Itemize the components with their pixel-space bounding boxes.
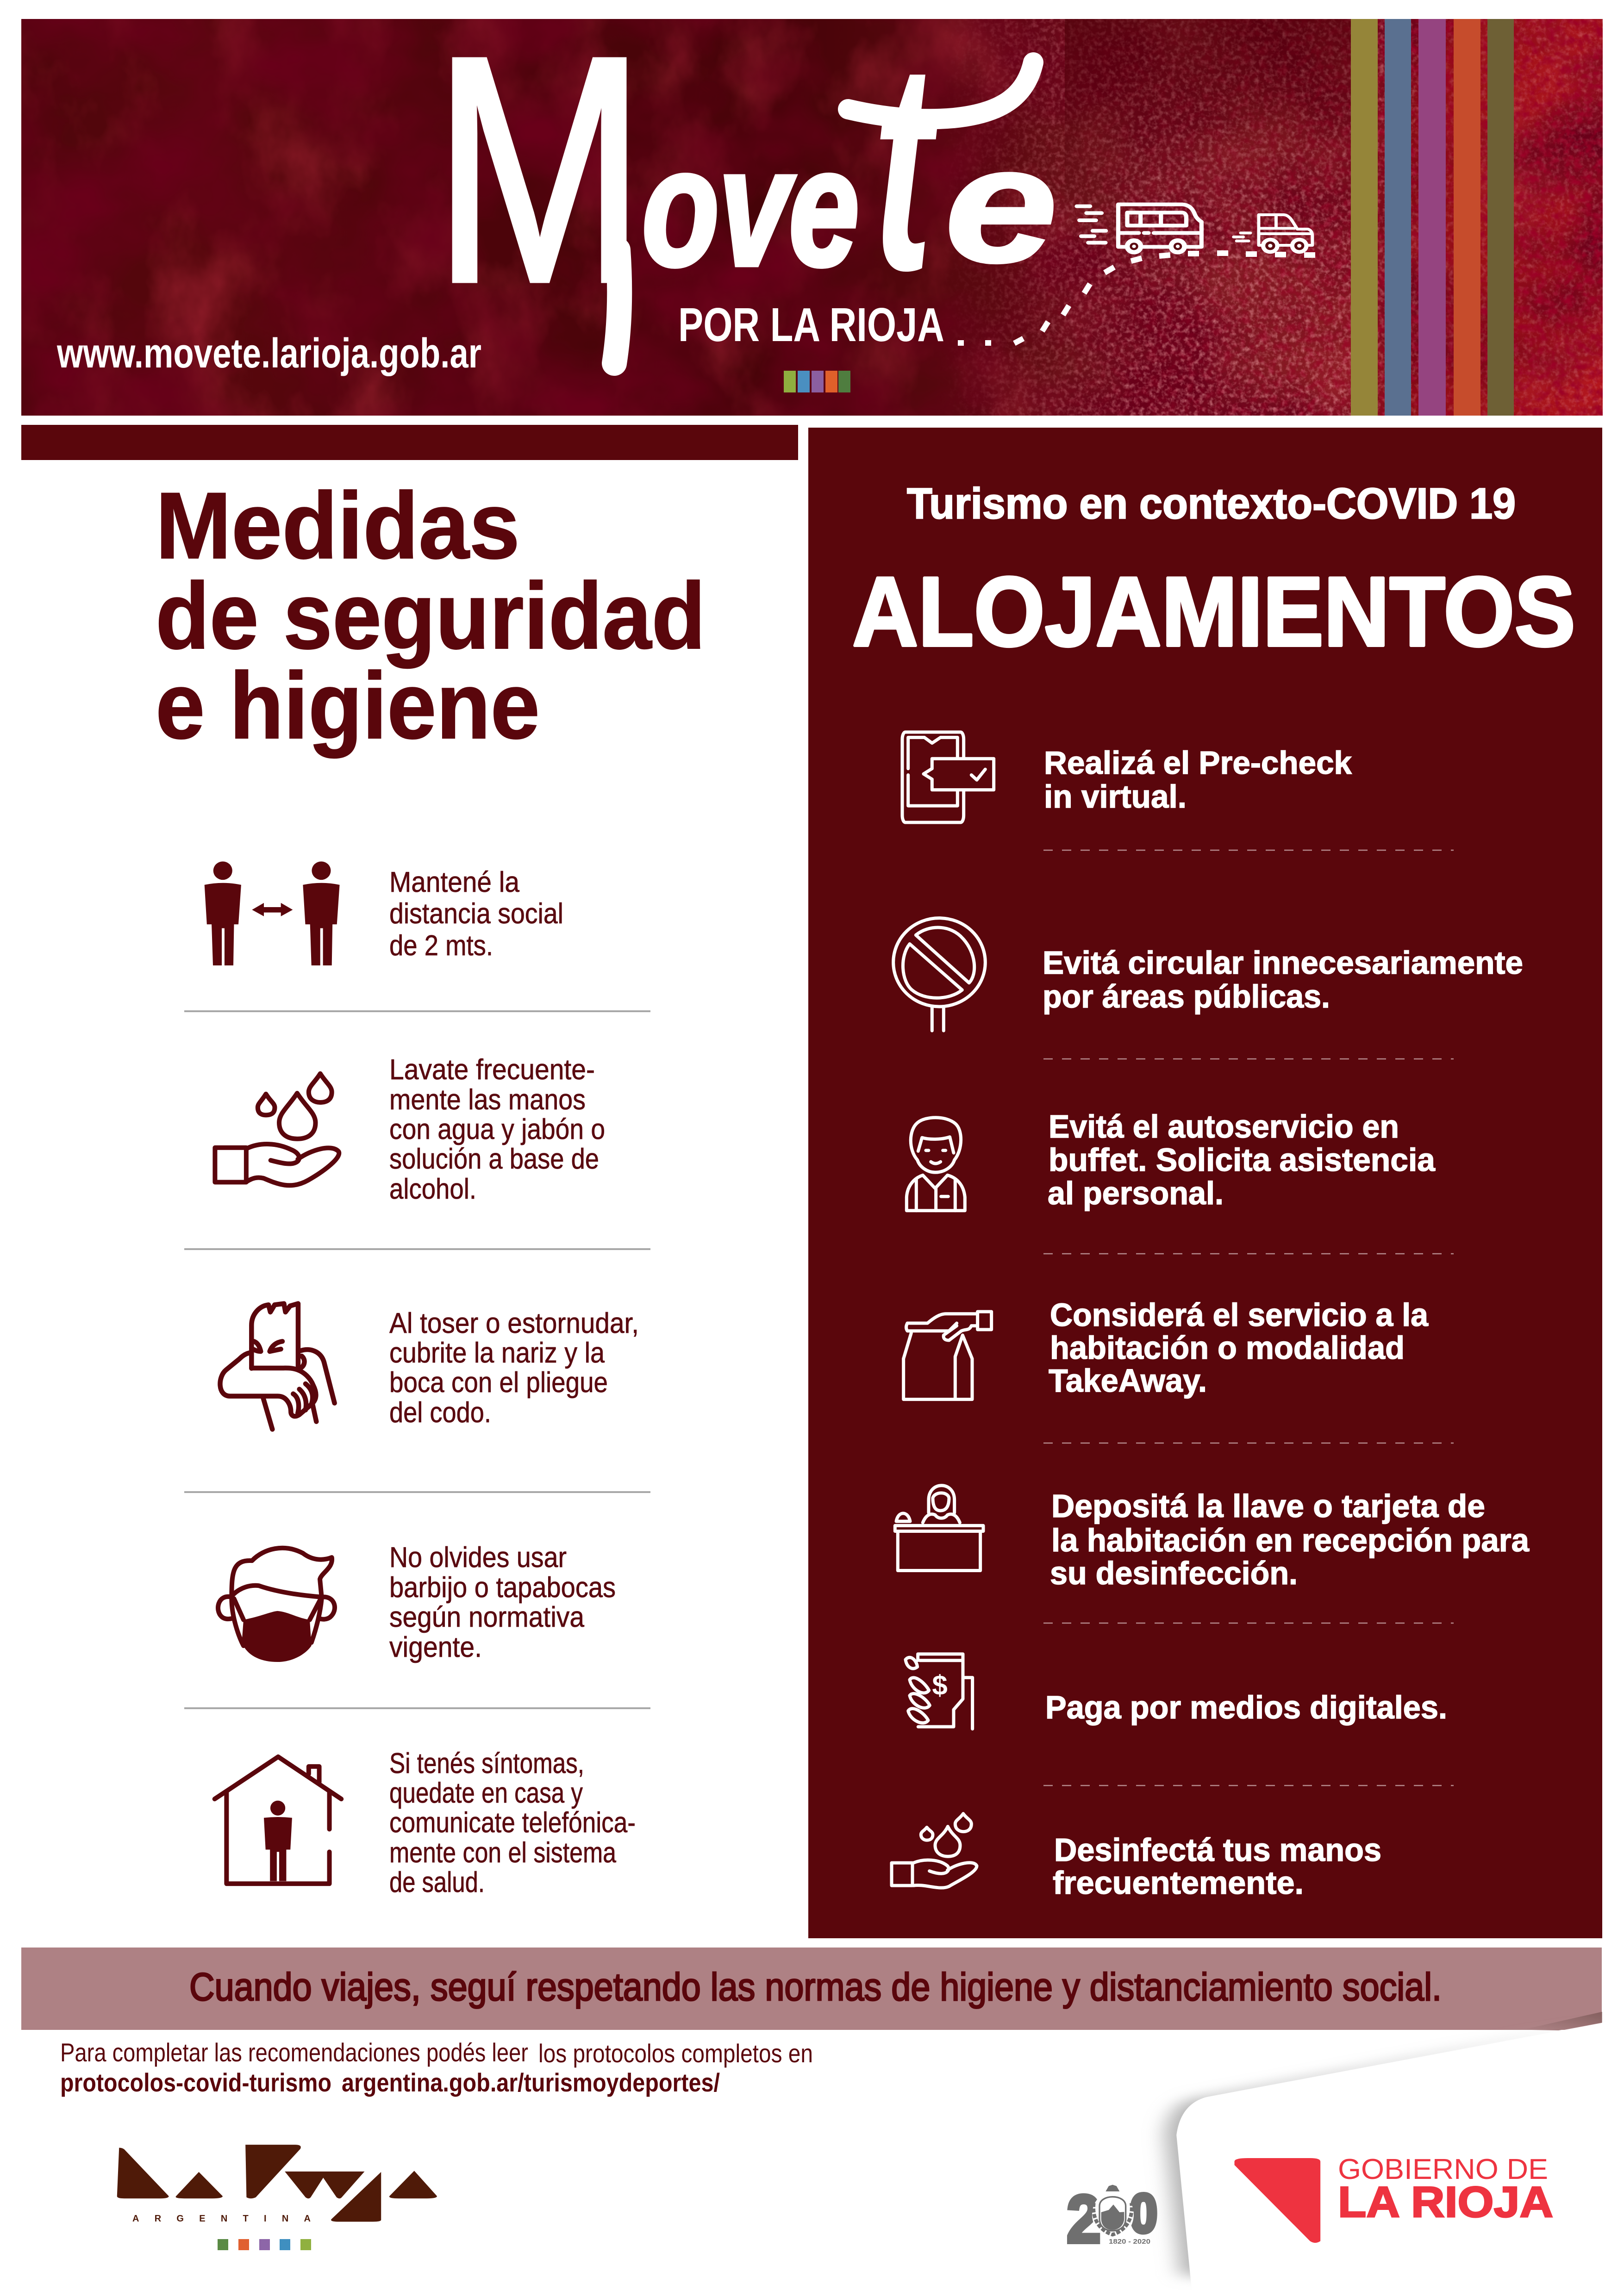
text: medios digitales: Paga por medios digitales. (1045, 1689, 1447, 1725)
script logotype Movete: t (873, 0, 940, 333)
text: lavado de manos: mente las manos (389, 1084, 586, 1116)
logo red triangle (1235, 2158, 1320, 2243)
text: desinfectá manos: frecuentemente. (1053, 1865, 1304, 1901)
colour bars under tagline (784, 371, 850, 392)
icon: phone pre-check (902, 732, 994, 822)
la rioja: LA RIOJA (1338, 2178, 1553, 2226)
text: servicio a la habitación: habitación o modalidad (1050, 1330, 1405, 1366)
heading: medidas de seguridad e higiene: Medidas (156, 473, 520, 579)
text: servicio a la habitación: TakeAway. (1049, 1363, 1207, 1399)
icon: digital payment (906, 1654, 973, 1729)
text: pre-check (1044, 745, 1352, 815)
icon: stay home (215, 1757, 341, 1884)
gobierno de: GOBIERNO DE (1338, 2153, 1548, 2185)
text: barbijo: vigente. (389, 1631, 482, 1663)
heading: medidas de seguridad e higiene: de seguridad (156, 563, 706, 669)
text: toser o estornudar: Al toser o estornudar, (389, 1307, 639, 1339)
protocol links: protocolos-covid-turismo (60, 2068, 331, 2097)
logo triangles (117, 2145, 437, 2222)
panel: medidas de seguridad e higiene (156, 473, 706, 1898)
dashed route (958, 250, 1315, 346)
text: lavado de manos: Lavate frecuente- (389, 1054, 595, 1086)
panel background (808, 428, 1602, 1938)
left header bar (21, 425, 798, 460)
text: depositá la llave: Depositá la llave o tarjeta de (1051, 1488, 1485, 1524)
text: lavado de manos: con agua y jabón o (389, 1114, 605, 1145)
text: servicio a la habitación: Considerá el servicio a la (1050, 1297, 1429, 1333)
text: desinfectá manos: Desinfectá tus manos (1054, 1832, 1381, 1868)
website url: www.movete.larioja.gob.ar (56, 330, 481, 377)
icon: staff person (906, 1118, 965, 1211)
protocol links: los protocolos completos en (538, 2039, 813, 2068)
text: síntomas: quedate en casa y (389, 1777, 583, 1809)
protocol links: argentina.gob.ar/turismoydeportes/ (342, 2068, 720, 2097)
script logotype Movete: e (944, 113, 1058, 296)
subtitle: Turismo en contexto-COVID 19 (907, 479, 1516, 528)
page curl (1165, 2012, 1624, 2296)
text: buffet: Evitá el autoservicio en (1049, 1108, 1399, 1145)
text: pre-check: in virtual. (1044, 778, 1187, 815)
text: síntomas (389, 1748, 636, 1898)
text: toser o estornudar: cubrite la nariz y la (389, 1337, 605, 1369)
text: áreas públicas: por áreas públicas. (1043, 978, 1330, 1014)
logo wordmark argentina: ARGENTINA (132, 2214, 311, 2224)
text: buffet: buffet. Solicita asistencia (1049, 1142, 1436, 1178)
logo: la rioja argentina (117, 2145, 437, 2250)
text: toser o estornudar: boca con el pliegue (389, 1367, 608, 1399)
text: barbijo: según normativa (389, 1601, 584, 1633)
text: barbijo: No olvides usar (389, 1542, 567, 1574)
text: distancia social (389, 866, 563, 962)
text: síntomas: de salud. (389, 1867, 485, 1898)
text: toser o estornudar (389, 1307, 639, 1429)
logo: gobierno de la rioja (1235, 2153, 1553, 2243)
text: distancia social: Mantené la (389, 866, 519, 898)
icon: takeaway bag and spray (904, 1312, 992, 1400)
logo: bicentenario 200 (1067, 2181, 1157, 2257)
years: 1820 - 2020 (1109, 2238, 1150, 2246)
text: síntomas: mente con el sistema (389, 1837, 616, 1869)
protocol links: Para completar las recomendaciones podés leer (60, 2038, 528, 2067)
banner coloured stripes (1351, 19, 1514, 416)
script logotype Movete (433, 0, 1058, 363)
text: distancia social: de 2 mts. (389, 930, 493, 962)
tagline por la rioja: POR LA RIOJA (678, 298, 944, 351)
heading: medidas de seguridad e higiene (156, 473, 706, 759)
icon: car (1234, 215, 1312, 254)
text: servicio a la habitación (1049, 1297, 1429, 1399)
icon: social distance (205, 861, 340, 965)
text: depositá la llave (1050, 1488, 1530, 1591)
script logotype Movete: M (433, 0, 645, 348)
logo: bicentenario 200: 2 (1067, 2181, 1101, 2257)
icon: cough into elbow (220, 1304, 335, 1429)
text: buffet (1048, 1108, 1436, 1211)
icon: hand disinfect (892, 1814, 977, 1888)
script logotype Movete: ove (642, 114, 859, 300)
text: barbijo (389, 1542, 616, 1663)
text: desinfectá manos (1053, 1832, 1381, 1901)
header banner (21, 0, 1603, 416)
text: lavado de manos: solución a base de (389, 1143, 599, 1175)
text: lavado de manos: alcohol. (389, 1173, 476, 1205)
icon: van (1077, 205, 1201, 255)
panel: alojamientos (808, 428, 1602, 1938)
logo: bicentenario 200: 0 (1130, 2183, 1157, 2244)
heading: medidas de seguridad e higiene: e higiene (156, 653, 540, 759)
emblem (1092, 2185, 1134, 2238)
icon: face mask (218, 1548, 335, 1662)
icon: digital payment: $ (932, 1670, 948, 1701)
text: síntomas: Si tenés síntomas, (389, 1748, 584, 1780)
text: barbijo: barbijo o tapabocas (389, 1572, 616, 1604)
band slogan: Cuando viajes, seguí respetando las normas de higiene y distanciamiento social. (189, 1965, 1442, 2009)
title alojamientos: ALOJAMIENTOS (852, 557, 1575, 667)
text: síntomas: comunicate telefónica- (389, 1807, 636, 1839)
banner textured background (21, 19, 1603, 416)
text: depositá la llave: su desinfección. (1050, 1555, 1298, 1591)
text: pre-check: Realizá el Pre-check (1044, 745, 1352, 781)
text: buffet: al personal. (1048, 1175, 1224, 1211)
text: distancia social: distancia social (389, 898, 563, 930)
logo colour bars (218, 2239, 311, 2250)
protocol links (60, 2038, 813, 2097)
icon: prohibited sign (893, 918, 985, 1031)
text: áreas públicas (1043, 945, 1523, 1014)
text: depositá la llave: la habitación en recepción para (1051, 1522, 1530, 1558)
text: lavado de manos (389, 1054, 605, 1205)
icon: hand washing (215, 1074, 339, 1185)
footer band (21, 1948, 1602, 2030)
text: áreas públicas: Evitá circular innecesariamente (1043, 945, 1523, 981)
text: toser o estornudar: del codo. (389, 1397, 491, 1429)
icon: reception desk (895, 1486, 983, 1571)
